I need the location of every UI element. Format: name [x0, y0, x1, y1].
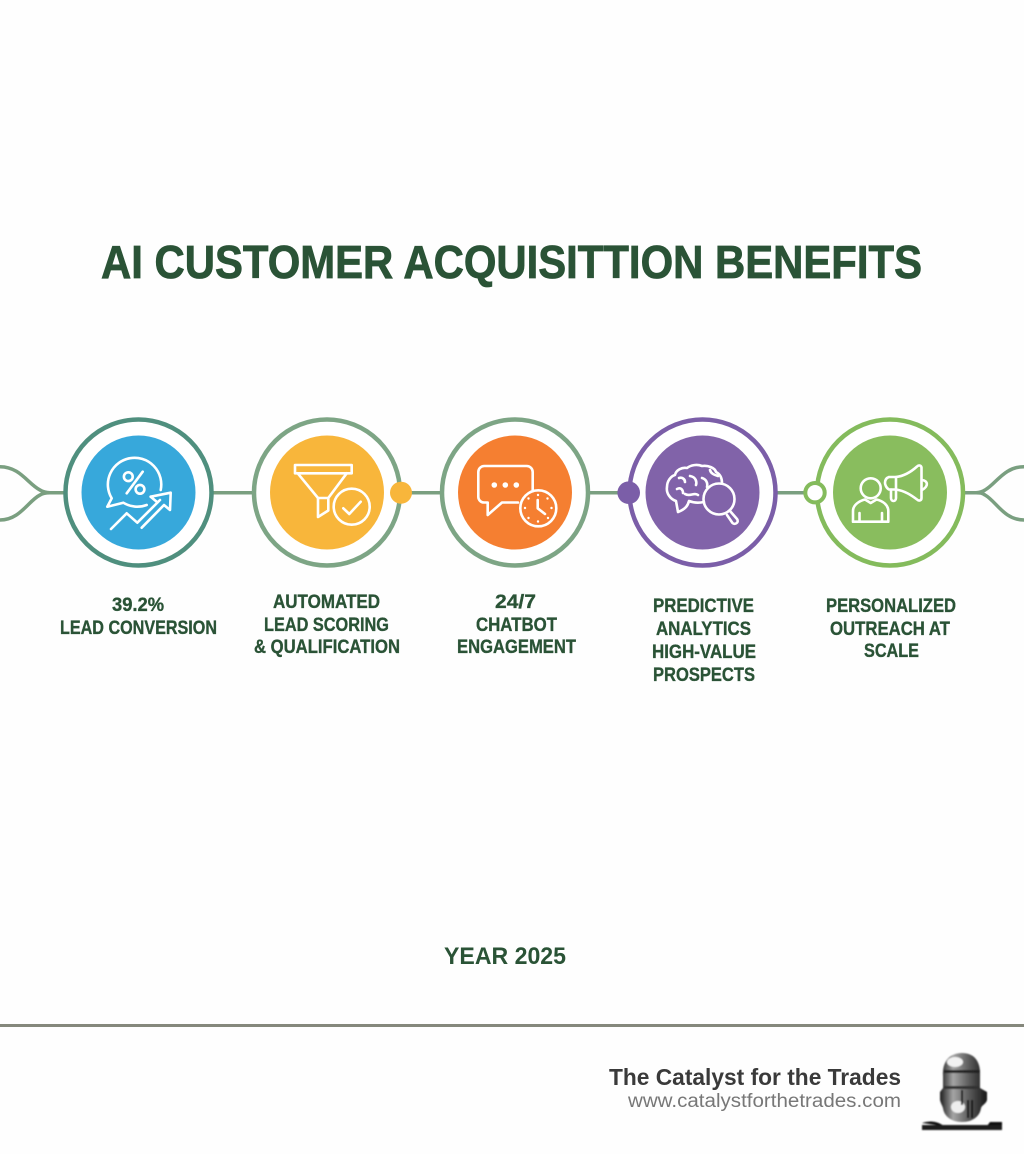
dot: purple node: [617, 481, 640, 504]
label 3: [457, 592, 576, 658]
icon: percent speech bubble with rising arrow: [107, 458, 171, 529]
disc 5: [833, 436, 947, 550]
label 5: PERSONALIZED: [826, 596, 956, 617]
label 2: LEAD SCORING: [264, 615, 389, 636]
disc 3: [458, 436, 572, 550]
step 1: lead conversion: [66, 420, 212, 566]
label 2: AUTOMATED: [273, 592, 380, 613]
label 4: PREDICTIVE: [653, 596, 754, 617]
label 4: [652, 596, 756, 686]
label 5: OUTREACH AT: [830, 619, 950, 640]
label 4: PROSPECTS: [653, 665, 755, 686]
disc 1: [82, 436, 196, 550]
label 4: HIGH-VALUE: [652, 642, 756, 663]
label 3: CHATBOT: [476, 615, 557, 636]
label 1: [60, 595, 217, 639]
step 5: personalized outreach: [805, 420, 963, 566]
icon: vintage microphone logo: [922, 1053, 1002, 1130]
label 1: LEAD CONVERSION: [60, 618, 217, 639]
title: AI CUSTOMER ACQUISITTION BENEFITS: [101, 236, 922, 288]
icon: chat bubble with clock: [478, 466, 556, 526]
label 5: [826, 596, 956, 662]
ring 3: [442, 420, 588, 566]
label 3: ENGAGEMENT: [457, 637, 576, 658]
label 2: [254, 592, 400, 658]
icon details: dots: [492, 482, 553, 523]
label 1: 39.2%: [112, 595, 164, 616]
step 3: chatbot: [442, 420, 588, 566]
dot: yellow node: [390, 482, 412, 504]
year label: YEAR 2025: [444, 943, 566, 970]
label 2: & QUALIFICATION: [254, 637, 400, 658]
step 4: predictive analytics: [617, 420, 776, 566]
icon: funnel with check mark: [295, 465, 370, 525]
ring 4: [630, 420, 776, 566]
dot: green ring node: [805, 483, 825, 502]
icon: brain with magnifier: [667, 465, 738, 524]
footer rule: [0, 1024, 1024, 1027]
label 3: 24/7: [495, 592, 536, 613]
step 2: lead scoring: [254, 420, 412, 566]
disc 2: [270, 436, 384, 550]
icon: person with megaphone: [853, 465, 927, 522]
connector: timeline line and end loops: [0, 467, 1024, 520]
ring 5: [817, 420, 963, 566]
ring 2: [254, 420, 400, 566]
footer brand name: The Catalyst for the Trades: [609, 1064, 901, 1090]
label 5: SCALE: [864, 641, 919, 662]
footer website: www.catalystforthetrades.com: [627, 1091, 901, 1112]
label 4: ANALYTICS: [656, 619, 751, 640]
ring 1: [66, 420, 212, 566]
disc 4: [646, 436, 760, 550]
